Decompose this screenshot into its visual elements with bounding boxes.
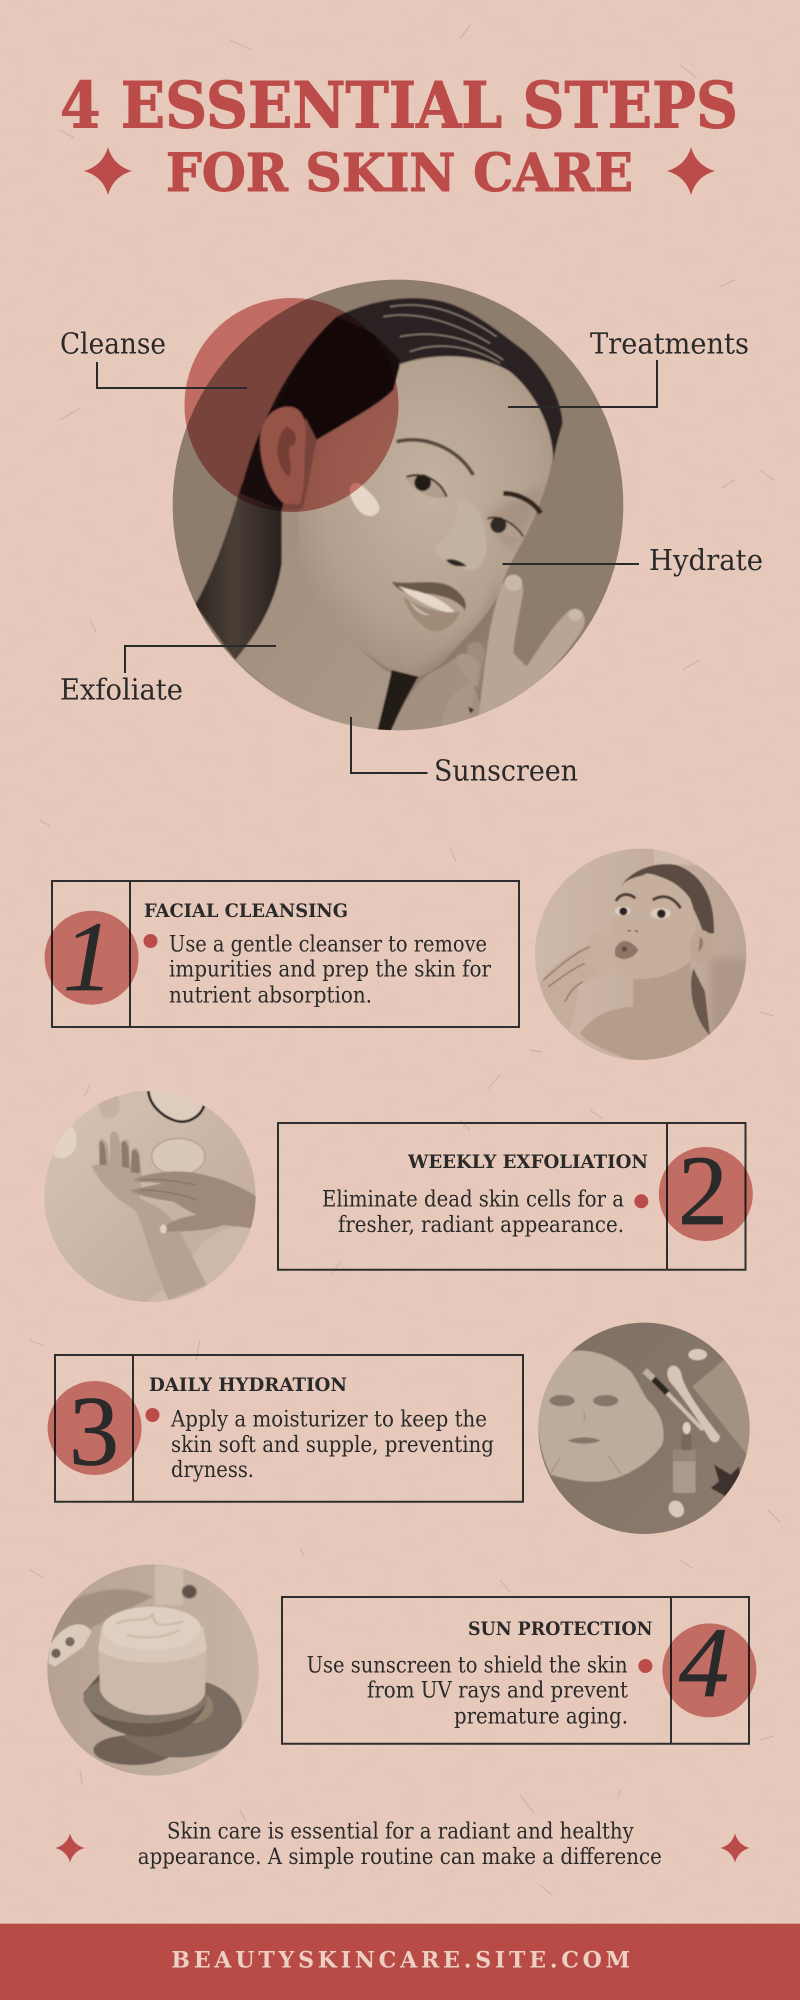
step 3 photo: sheet mask and tools	[534, 1318, 754, 1538]
step 4 numeral: 4	[679, 1607, 729, 1718]
callout: sunscreen: Sunscreen	[434, 754, 578, 788]
footer bar	[0, 1924, 800, 2000]
step 3 panel	[48, 1318, 754, 1538]
step 1 box	[52, 881, 519, 1027]
step 2 number badge	[659, 1147, 753, 1241]
step 4 heading: SUN PROTECTION	[468, 1618, 652, 1640]
step 3 box	[55, 1355, 523, 1502]
step 3 body text: Apply a moisturizer to keep the	[170, 1407, 487, 1432]
title line 2: FOR SKIN CARE	[166, 143, 633, 204]
step 4 number badge	[662, 1623, 756, 1717]
step 4 panel	[40, 1560, 756, 1780]
step 3 body text: dryness.	[171, 1458, 254, 1483]
step 1 panel	[45, 845, 750, 1065]
step 2 box	[278, 1123, 746, 1270]
title line 1: 4 ESSENTIAL STEPS	[60, 68, 738, 144]
step 4 body text	[307, 1653, 628, 1730]
closing message	[138, 1819, 662, 1870]
callout: exfoliate: Exfoliate	[60, 672, 183, 706]
step 3 body text	[170, 1407, 494, 1483]
icon: left sparkle	[84, 147, 132, 195]
step 1 body text: impurities and prep the skin for	[169, 958, 491, 983]
step 2 body text: fresher, radiant appearance.	[338, 1213, 624, 1238]
callout: sunscreen	[351, 717, 578, 788]
step 3 number badge	[48, 1381, 142, 1475]
icon: right sparkle	[667, 147, 715, 195]
step 4 body text: Use sunscreen to shield the skin	[307, 1653, 628, 1678]
step 3 numeral: 3	[69, 1375, 119, 1486]
step 1 body text: Use a gentle cleanser to remove	[169, 933, 487, 958]
step 3 body text: skin soft and supple, preventing	[171, 1433, 494, 1458]
step 1 heading: FACIAL CLEANSING	[144, 900, 348, 922]
step 2 heading: WEEKLY EXFOLIATION	[407, 1151, 648, 1173]
step 4 bullet	[638, 1659, 652, 1673]
step 1 photo: woman with sponge	[530, 845, 750, 1065]
footer url: BEAUTYSKINCARE.SITE.COM	[171, 1947, 630, 1973]
callout: cleanse: Cleanse	[60, 326, 166, 360]
red overlay circle	[184, 298, 398, 512]
title	[60, 68, 738, 204]
callout: treatments	[508, 326, 749, 407]
step 2 body text: Eliminate dead skin cells for a	[322, 1188, 624, 1213]
step 4 photo: cream jar	[40, 1560, 267, 1780]
callout: exfoliate	[60, 646, 276, 706]
portrait diagram	[60, 277, 763, 788]
step 2 bullet	[634, 1194, 648, 1208]
step 4 body text: premature aging.	[454, 1705, 628, 1730]
callout: cleanse	[60, 326, 247, 388]
step 3 heading: DAILY HYDRATION	[149, 1374, 347, 1396]
closing message: appearance. A simple routine can make a difference	[138, 1845, 662, 1870]
step 1 number badge	[45, 911, 139, 1005]
step 1 body text: nutrient absorption.	[169, 983, 372, 1008]
step 1 bullet	[144, 934, 158, 948]
step 4 body text: from UV rays and prevent	[367, 1678, 628, 1703]
portrait photo circle	[167, 277, 633, 743]
callout: treatments: Treatments	[590, 326, 749, 360]
step 1 numeral: 1	[63, 901, 113, 1012]
closing message: Skin care is essential for a radiant and healthy	[167, 1819, 634, 1844]
step 3 bullet	[146, 1408, 160, 1422]
step 2 numeral: 2	[678, 1135, 728, 1246]
icon: closing left sparkle	[56, 1834, 84, 1862]
step 2 panel	[40, 1085, 753, 1305]
step 4 box	[282, 1597, 749, 1744]
icon: closing right sparkle	[720, 1834, 750, 1862]
step 1 body text	[169, 933, 491, 1008]
callout: hydrate: Hydrate	[649, 543, 763, 577]
step 2 body text	[322, 1188, 624, 1238]
step 2 photo: hands	[40, 1085, 260, 1305]
